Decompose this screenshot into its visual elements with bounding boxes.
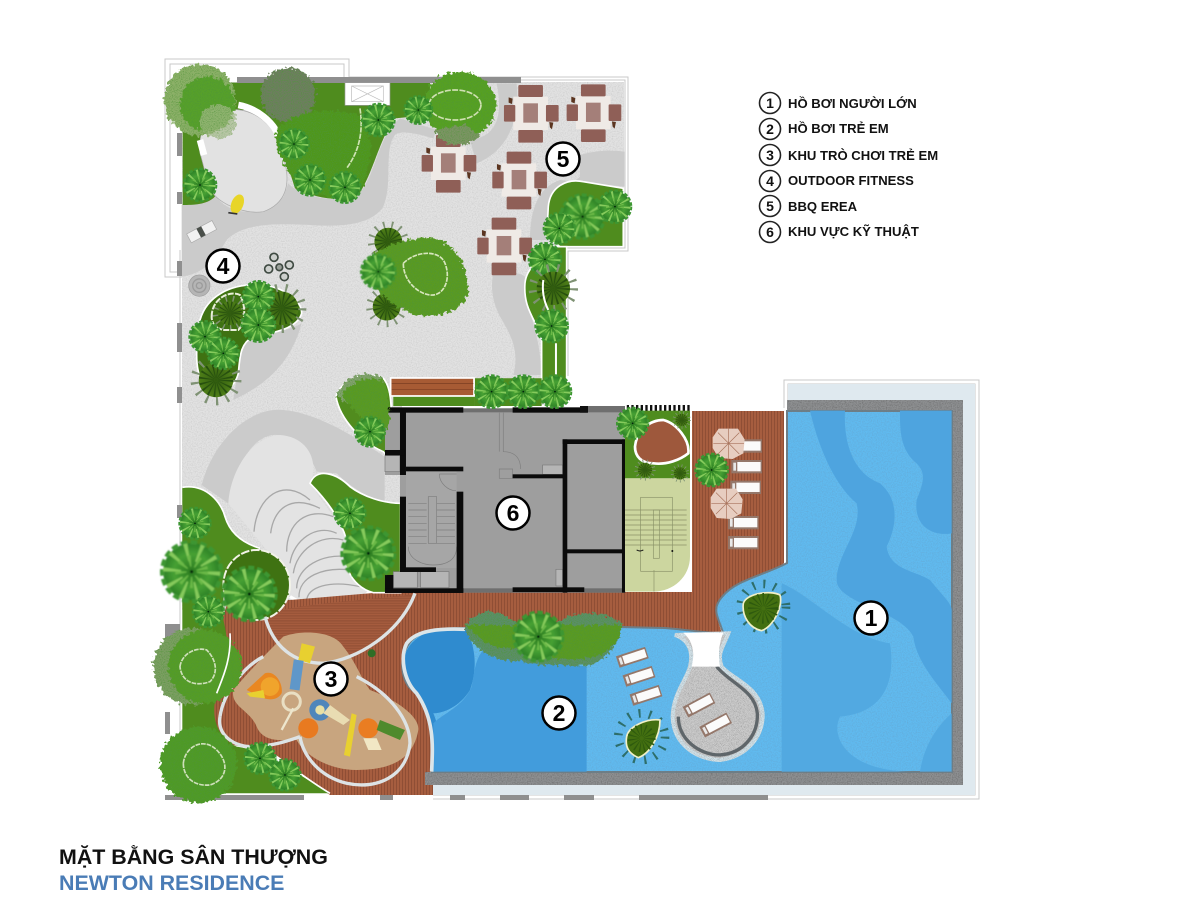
deck loungers and umbrellas (711, 428, 762, 549)
legend item 2: 2 (766, 121, 774, 137)
round fitness pad (189, 275, 210, 296)
outdoor fitness equipment (187, 192, 293, 296)
legend item 2: HỒ BƠI TRẺ EM (788, 121, 889, 136)
marker 6 (496, 496, 530, 530)
site boundary outlines (165, 59, 979, 800)
play equipment (247, 643, 405, 757)
play surface (233, 632, 418, 770)
island above building planting (336, 374, 390, 430)
legend item 6 (760, 222, 919, 242)
pool palm islands (618, 584, 786, 760)
yellow rower (228, 192, 247, 216)
legend item 4: OUTDOOR FITNESS (788, 173, 914, 188)
dark gravel paths (182, 83, 624, 503)
planting beds (182, 83, 623, 793)
legend item 6: 6 (766, 224, 774, 240)
legend item 4 (760, 170, 914, 192)
marker 3 (314, 662, 348, 696)
legend item 2 (760, 118, 889, 140)
service fixtures (385, 456, 563, 588)
legend item 4: 4 (766, 173, 774, 189)
legend item 3: KHU TRÒ CHƠI TRẺ EM (788, 148, 938, 163)
island above building (336, 375, 391, 460)
playground (220, 593, 418, 785)
marker 3: 3 (325, 666, 337, 692)
pool deep zones (782, 411, 952, 772)
marker 4 (206, 250, 240, 282)
east border planting (476, 191, 631, 407)
subtitle: NEWTON RESIDENCE (59, 871, 284, 895)
marker 2: 2 (553, 700, 565, 726)
amphitheatre steps (228, 435, 373, 609)
technical building block (385, 407, 625, 593)
legend item 5: BBQ EREA (788, 199, 858, 214)
curved pale paths (220, 593, 415, 785)
roof walls (165, 77, 768, 800)
marker 1 (854, 602, 888, 634)
legend item 5 (760, 196, 858, 216)
lower-left planting (182, 473, 401, 793)
legend item 1: HỒ BƠI NGƯỜI LỚN (788, 96, 917, 111)
trees and shrubs (153, 64, 727, 803)
left island planting (190, 282, 302, 401)
deck shrubs (618, 408, 727, 486)
legend item 3: 3 (766, 147, 774, 163)
upper terrace trees (164, 64, 496, 202)
legend item 5: 5 (766, 198, 774, 214)
island terrace with loungers (616, 584, 786, 760)
title: MẶT BẰNG SÂN THƯỢNG (59, 844, 328, 869)
ring machine (265, 253, 293, 281)
pool-side planter (465, 612, 623, 667)
legend item 3 (760, 144, 938, 166)
patio lawn circle (200, 105, 287, 212)
structural walls (385, 407, 625, 593)
zone markers on plan (206, 142, 888, 730)
children's pool shaded zones (403, 628, 587, 772)
skylight (345, 83, 390, 105)
marker 6: 6 (507, 500, 519, 526)
legend (760, 92, 938, 242)
legend item 6: KHU VỰC KỸ THUẬT (788, 224, 919, 239)
centre island planting (362, 225, 468, 324)
roof terrace gravel floor (182, 82, 624, 610)
pool loungers (616, 647, 662, 706)
garden bench (391, 378, 474, 396)
legend item 1 (760, 92, 917, 114)
marker 1: 1 (865, 605, 878, 631)
marker 4: 4 (217, 253, 230, 279)
fitness bench (187, 221, 217, 243)
left island (197, 285, 302, 391)
legend item 1: 1 (766, 95, 774, 111)
marker 2 (542, 696, 576, 730)
lower-left trees (153, 417, 394, 803)
small garden palms (636, 412, 689, 481)
pool surround (425, 384, 975, 795)
marker 5 (546, 142, 580, 176)
exterior stair block and roof garden (580, 405, 690, 592)
marker 5: 5 (557, 146, 570, 172)
swimming pools (402, 411, 952, 772)
stairwell (408, 413, 521, 565)
BBQ tables (422, 84, 621, 275)
timber decking (212, 411, 784, 795)
